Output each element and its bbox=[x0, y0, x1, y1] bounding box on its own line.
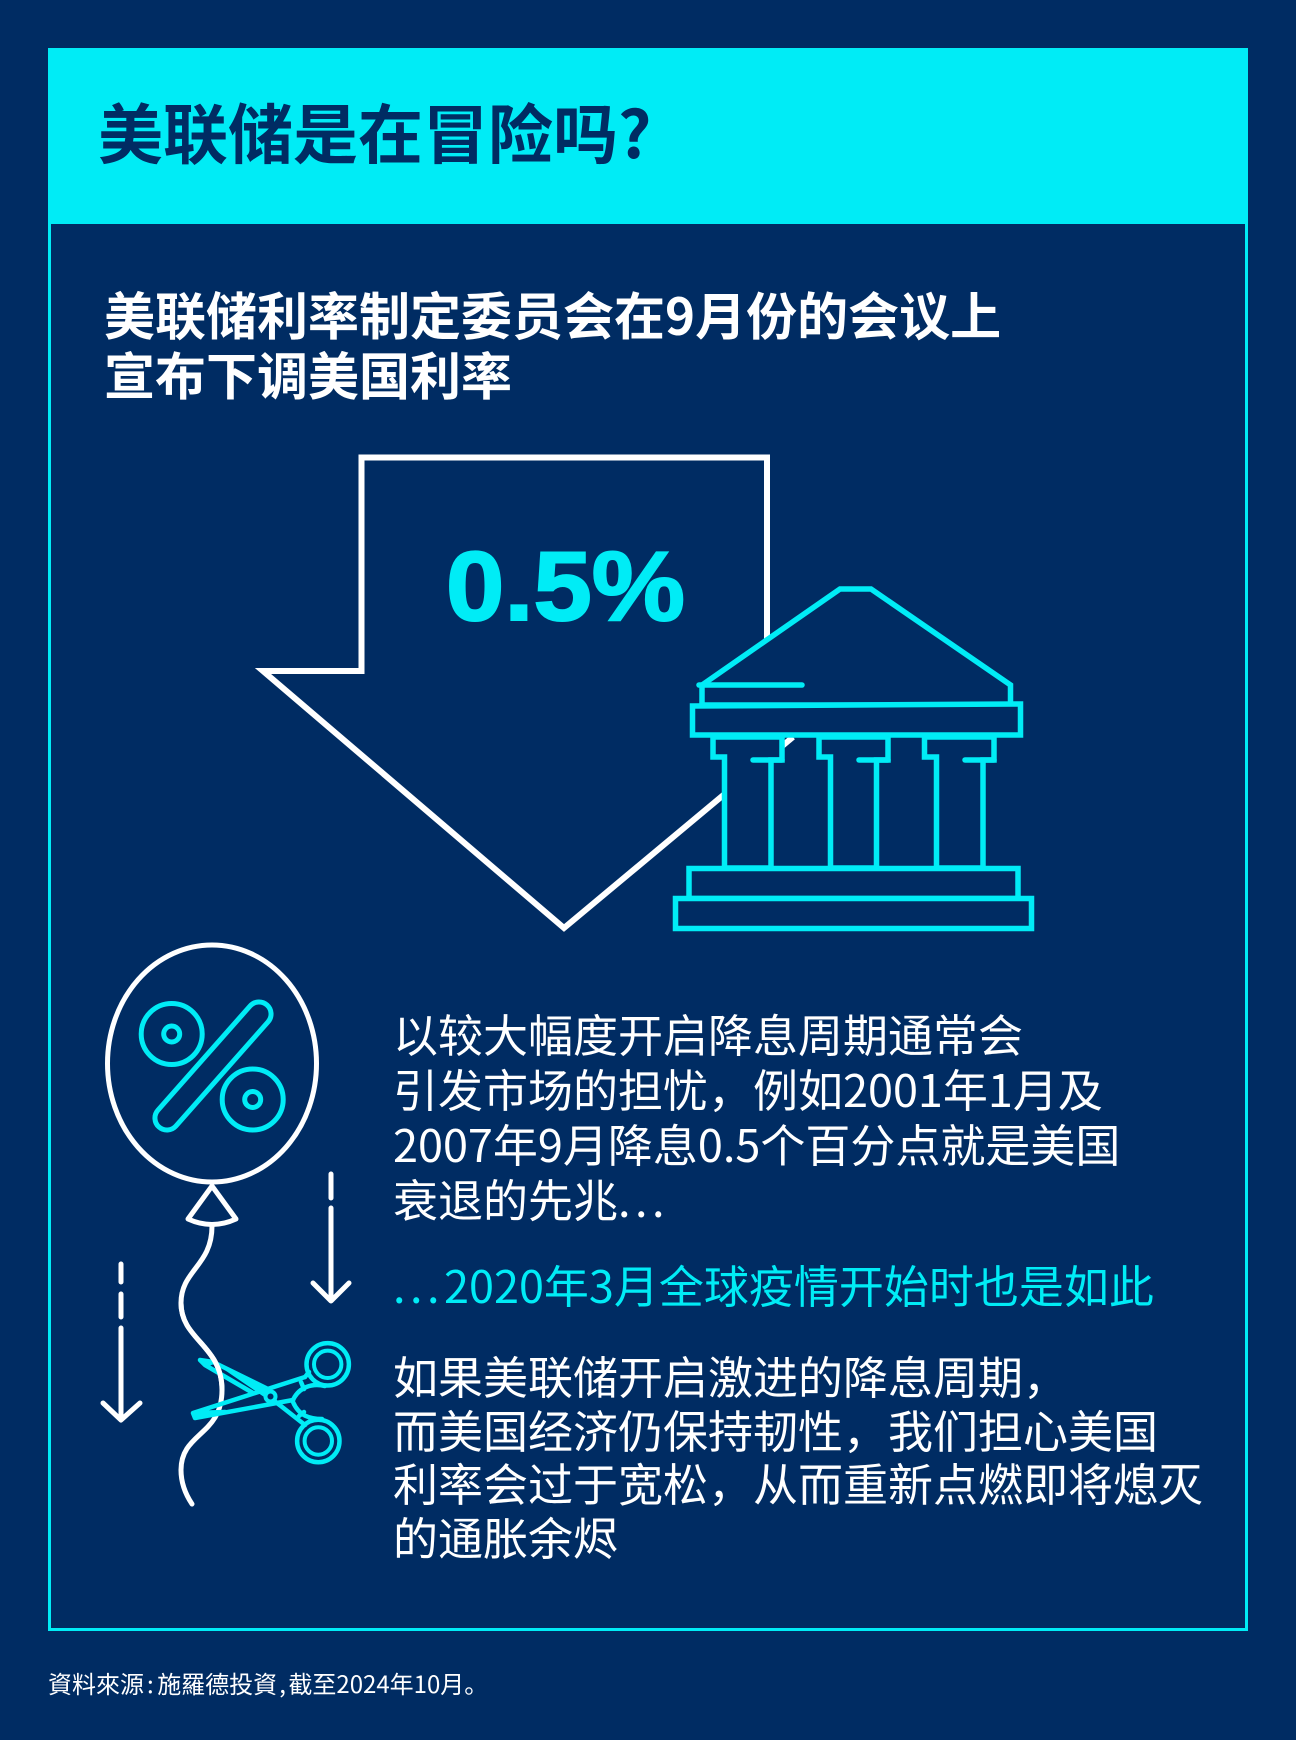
subheading: 美联储利率制定委员会在9月份的会议上 bbox=[104, 276, 1001, 350]
arrow: rate cut bbox=[263, 458, 793, 928]
title: 美联储是在冒险吗? bbox=[98, 83, 651, 177]
arrow: right falling arrow bbox=[313, 1174, 349, 1301]
text block: market worry: 以较大幅度开启降息周期通常会 bbox=[393, 1000, 1023, 1065]
text block: our concern: 如果美联储开启激进的降息周期， bbox=[393, 1342, 1068, 1407]
subheading: 宣布下调美国利率 bbox=[104, 336, 512, 410]
panel: title banner bbox=[48, 48, 1248, 224]
number: 0.5%: 0.5% bbox=[446, 531, 685, 641]
text block: our concern bbox=[393, 1342, 1203, 1568]
subheading bbox=[104, 276, 1001, 410]
text block: our concern: 而美国经济仍保持韧性，我们担心美国 bbox=[393, 1396, 1158, 1461]
text block: market worry bbox=[393, 1000, 1120, 1230]
text block: 2020 highlight: ...2020年3月全球疫情开始时也是如此 bbox=[393, 1251, 1154, 1316]
icon: scissors bbox=[181, 1303, 349, 1462]
icon: balloon bbox=[108, 945, 316, 1504]
text block: market worry: 引发市场的担忧，例如2001年1月及 bbox=[393, 1055, 1103, 1120]
text block: our concern: 利率会过于宽松，从而重新点燃即将熄灭 bbox=[393, 1449, 1203, 1514]
text block: our concern: 的通胀余烬 bbox=[393, 1503, 618, 1568]
arrow: left falling arrow bbox=[103, 1264, 140, 1420]
icon: bank building bbox=[676, 589, 1032, 928]
text block: market worry: 2007年9月降息0.5个百分点就是美国 bbox=[393, 1110, 1120, 1175]
text block: market worry: 衰退的先兆... bbox=[393, 1165, 669, 1230]
icon: percent sign bbox=[141, 997, 283, 1135]
footer: source: 資料來源:施羅德投資,截至2024年10月。 bbox=[48, 1665, 488, 1700]
